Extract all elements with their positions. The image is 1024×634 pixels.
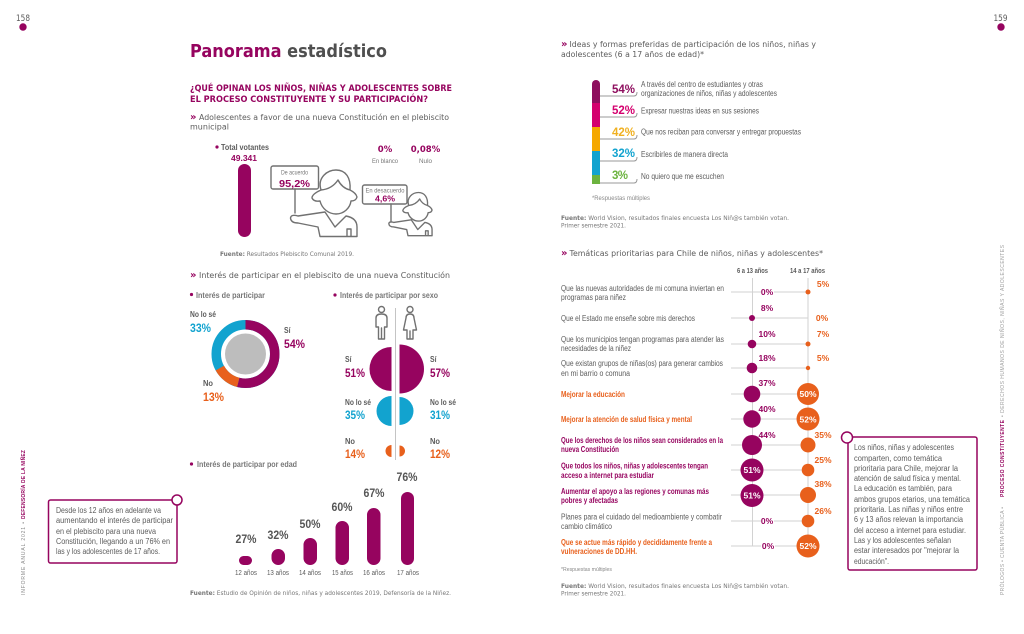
panel: interés por sexo: No lo sé <box>345 398 371 407</box>
row labels: Que todos los niños, niñas y adolescentes tengan <box>561 462 708 470</box>
list: formas de participación: 42% <box>612 127 635 139</box>
percentages 6 a 13 años: 8% <box>761 303 774 313</box>
stat: en blanco y nulo <box>372 145 441 165</box>
list: formas de participación: Escribirles de manera directa <box>641 150 728 159</box>
percentages 6 a 13 años: 0% <box>761 287 774 297</box>
row labels: nueva Constitución <box>561 445 619 454</box>
panel: interés de participar donut: Interés de participar <box>196 291 265 300</box>
subheading: adolescentes a favor: Adolescentes a favor de una nueva Constitución en el plebiscito <box>199 112 449 122</box>
age labels: 15 años <box>332 570 353 577</box>
percentages 6 a 13 años: 51% <box>743 465 761 475</box>
page number 159 <box>994 14 1008 31</box>
list: formas de participación: 32% <box>612 148 635 160</box>
panel: interés de participar donut <box>190 291 305 404</box>
side text left <box>19 450 27 595</box>
callout: desde los 12 años: las y los adolescentes de 17 años. <box>56 547 160 556</box>
callout: los niños, niñas y adolescentes: atención de salud física y mental. <box>854 474 961 483</box>
list: formas de participación: 52% <box>612 105 635 117</box>
panel: interés por sexo: 12% <box>430 449 450 461</box>
chart: temáticas prioritarias <box>561 268 832 558</box>
subheading: interés de participar: » <box>190 270 196 281</box>
panel: interés de participar donut: 33% <box>190 323 211 335</box>
percentages 14 a 17 años: 38% <box>814 479 832 489</box>
source: world vision 2 <box>561 583 789 598</box>
panel: interés por edad bar chart: Interés de participar por edad <box>197 460 297 469</box>
percentages 14 a 17 años: 52% <box>799 541 817 551</box>
panel: total votantes <box>215 143 269 237</box>
icon: woman <box>404 306 416 339</box>
callout: los niños, niñas y adolescentes: La educación es también, para <box>854 484 952 493</box>
side text left: DEFENSORÍA DE LA NIÑEZ <box>19 450 27 519</box>
row labels: vulneraciones de DD.HH. <box>561 547 637 556</box>
panel: interés por sexo: No <box>430 437 440 446</box>
percentages 6 a 13 años: 0% <box>762 541 775 551</box>
subheading: ideas y formas: » <box>561 39 567 50</box>
panel: interés por sexo: 57% <box>430 368 450 380</box>
callout: desde los 12 años: aumentando el interés de participar <box>56 516 173 525</box>
callout: desde los 12 años: en el plebiscito para una nueva <box>56 527 156 536</box>
row labels: acceso a internet para estudiar <box>561 471 654 480</box>
row labels: necesidades de la niñez <box>561 344 631 353</box>
subheading: adolescentes a favor <box>190 112 449 132</box>
callout: desde los 12 años: Constitución, llegando a un 76% en <box>56 537 170 546</box>
callout: los niños, niñas y adolescentes: prioritaria. Las niñas y niños entre <box>854 505 964 514</box>
side text right: PROCESO CONSTITUYENTE <box>1000 419 1006 497</box>
panel: interés por sexo: No lo sé <box>430 398 456 407</box>
callout: los niños, niñas y adolescentes: Las y los adolescentes señalan <box>854 536 951 545</box>
page number 159: 159 <box>994 14 1008 24</box>
age labels: 17 años <box>397 570 419 577</box>
half circles <box>370 344 424 457</box>
page number 158 <box>16 14 30 31</box>
row labels: cambio climático <box>561 522 612 531</box>
source: plebiscito: Fuente: Resultados Plebiscito Comunal 2019. <box>220 252 354 258</box>
source: world vision 1: Fuente: World Vision, resultados finales encuesta Los Niñ@s también votan. <box>561 215 789 222</box>
title: Panorama estadístico <box>190 41 387 62</box>
list: formas de participación: No quiero que me escuchen <box>641 172 724 181</box>
callout: los niños, niñas y adolescentes: prioritaria para Chile, mejorar la <box>854 464 959 473</box>
percentages 14 a 17 años: 25% <box>814 455 832 465</box>
callout: los niños, niñas y adolescentes <box>842 432 977 570</box>
subheading: ideas y formas <box>561 39 816 59</box>
icon: adolescent with sign en desacuerdo <box>362 185 432 236</box>
age labels: 14 años <box>299 570 321 577</box>
subheading: ideas y formas: adolescentes (6 a 17 años de edad)* <box>561 50 704 59</box>
list: formas de participación: organizaciones de niños, niñas y adolescentes <box>641 89 777 98</box>
callout: los niños, niñas y adolescentes: comparten, como temática <box>854 454 943 463</box>
callout: los niños, niñas y adolescentes: Los niños, niñas y adolescentes <box>854 443 954 452</box>
section question heading: ¿QUÉ OPINAN LOS NIÑOS, NIÑAS Y ADOLESCENTES SOBRE <box>190 82 452 94</box>
stat: en blanco y nulo: Nulo <box>419 158 432 165</box>
percentages 14 a 17 años: 52% <box>799 414 817 424</box>
section question heading <box>190 82 452 105</box>
column headers <box>737 268 825 275</box>
callout: los niños, niñas y adolescentes: estar interesados por "mejorar la <box>854 546 959 555</box>
list: formas de participación: 3% <box>612 170 628 182</box>
list: formas de participación: Expresar nuestras ideas en sus sesiones <box>641 106 759 116</box>
panel: total votantes: 49.341 <box>231 153 257 163</box>
callout: desde los 12 años: Desde los 12 años en adelante va <box>56 506 161 515</box>
values: 67% <box>364 488 384 500</box>
row labels: Que existan grupos de niñas(os) para generar cambios <box>561 359 723 368</box>
panel: interés por sexo: 51% <box>345 368 365 380</box>
source: estudio de opinión: Fuente: Estudio de Opinión de niños, niñas y adolescentes 2019, Defensoría de la Niñez. <box>190 590 451 597</box>
subheading: adolescentes a favor: municipal <box>190 122 229 132</box>
percentages 6 a 13 años: 51% <box>743 490 761 500</box>
stat: en blanco y nulo: En blanco <box>372 158 398 165</box>
panel: interés por sexo: Sí <box>345 355 352 364</box>
age labels: 16 años <box>363 570 385 577</box>
panel: interés por sexo: 14% <box>345 449 365 461</box>
age labels: 13 años <box>267 570 289 577</box>
icon: adolescent with sign de acuerdo: De acuerdo <box>281 170 308 176</box>
icon: adolescent with sign de acuerdo: 95,2% <box>279 178 311 190</box>
values <box>236 472 418 546</box>
panel: interés por sexo: Sí <box>430 355 437 364</box>
list: formas de participación: Que nos reciban para conversar y entregar propuestas <box>641 128 801 136</box>
panel: interés de participar donut: No lo sé <box>190 310 216 319</box>
row labels: programas para niñez <box>561 293 626 302</box>
percentages 14 a 17 años: 0% <box>816 313 829 323</box>
panel: interés por sexo: Interés de participar por sexo <box>340 291 438 300</box>
column headers: 14 a 17 años <box>790 268 825 275</box>
percentages 14 a 17 años <box>799 279 832 551</box>
row labels: Mejorar la educación <box>561 390 625 399</box>
percentages 14 a 17 años: 7% <box>817 329 830 339</box>
percentages 14 a 17 años: 50% <box>799 389 817 399</box>
panel: interés de participar donut: Sí <box>284 326 291 335</box>
row labels <box>561 284 724 556</box>
values: 27% <box>236 534 256 546</box>
callout: los niños, niñas y adolescentes: ambos grupos etarios, una temática <box>854 495 970 504</box>
panel: interés por sexo <box>333 291 456 461</box>
grid lines <box>731 278 808 546</box>
values: 32% <box>268 530 288 542</box>
list: formas de participación <box>612 80 801 182</box>
panel: interés de participar donut: No <box>203 379 213 388</box>
values: 76% <box>396 472 418 484</box>
source: world vision 2: Primer semestre 2021. <box>561 592 626 598</box>
percentages 6 a 13 años: 44% <box>758 430 776 440</box>
percentages 14 a 17 años: 5% <box>817 279 830 289</box>
subheading: adolescentes a favor: » <box>190 112 196 123</box>
subheading: temáticas prioritarias: Temáticas prioritarias para Chile de niños, niñas y adolescentes* <box>569 249 823 258</box>
values: 50% <box>300 519 320 531</box>
column headers: 6 a 13 años <box>737 268 768 275</box>
panel: total votantes: Total votantes <box>221 143 269 152</box>
percentages 6 a 13 años: 40% <box>758 404 776 414</box>
section question heading: EL PROCESO CONSTITUYENTE Y SU PARTICIPACIÓN? <box>190 93 428 105</box>
bubbles 6 a 13 años <box>740 315 764 507</box>
percentages 14 a 17 años: 35% <box>814 430 832 440</box>
age labels: 12 años <box>235 570 257 577</box>
side text left: INFORME ANUAL 2021 • <box>21 522 27 595</box>
percentages 6 a 13 años: 37% <box>758 378 776 388</box>
icon: adolescent with sign en desacuerdo: 4,6% <box>375 194 395 204</box>
row labels: Que el Estado me enseñe sobre mis derechos <box>561 314 695 323</box>
percentages 6 a 13 años: 0% <box>761 516 774 526</box>
panel: interés por edad bar chart <box>190 460 419 577</box>
bubbles 14 a 17 años <box>796 290 820 558</box>
subheading: ideas y formas: Ideas y formas preferidas de participación de los niños, niñas y <box>570 39 816 49</box>
source: world vision 2: Fuente: World Vision, resultados finales encuesta Los Niñ@s también votan. <box>561 583 789 590</box>
row labels: Que los derechos de los niños sean considerados en la <box>561 436 723 445</box>
bars <box>239 492 414 565</box>
panel: interés por sexo: 35% <box>345 410 365 422</box>
panel: interés por sexo: 31% <box>430 410 450 422</box>
values: 60% <box>332 502 352 514</box>
percentages 6 a 13 años: 18% <box>758 353 776 363</box>
percentages 14 a 17 años: 26% <box>814 506 832 516</box>
note: respuestas múltiples 2: *Respuestas múltiples <box>561 567 612 573</box>
source: world vision 1: Primer semestre 2021. <box>561 224 626 230</box>
stat: en blanco y nulo: 0% <box>378 145 393 155</box>
row labels: en mi barrio o comuna <box>561 369 630 378</box>
row labels: Que los municipios tengan programas para atender las <box>561 335 724 344</box>
note: respuestas múltiples: *Respuestas múltiples <box>592 196 650 202</box>
callout: los niños, niñas y adolescentes: del acceso a internet para estudiar. <box>854 526 966 535</box>
callout: los niños, niñas y adolescentes: 6 y 13 años relevan la importancia <box>854 515 963 524</box>
row labels: Aumentar el apoyo a las regiones y comunas más <box>561 487 709 496</box>
side text right <box>999 244 1006 595</box>
age labels <box>235 570 419 577</box>
row labels: Que las nuevas autoridades de mi comuna inviertan en <box>561 284 724 293</box>
subheading: temáticas prioritarias: » <box>561 248 567 259</box>
stacked bar: formas de participación <box>592 80 637 184</box>
percentages 6 a 13 años <box>743 287 776 551</box>
row labels: Mejorar la atención de salud física y mental <box>561 415 692 424</box>
list: formas de participación: 54% <box>612 84 635 96</box>
icon: man <box>376 306 387 339</box>
icon: adolescent with sign de acuerdo <box>271 166 357 236</box>
row labels: pobres y afectadas <box>561 496 618 505</box>
panel: interés de participar donut: 13% <box>203 392 224 404</box>
callout: los niños, niñas y adolescentes: educación". <box>854 557 889 566</box>
source: world vision 1 <box>561 215 789 230</box>
side text right: • DERECHOS HUMANOS DE NIÑOS, NIÑAS Y ADOLESCENTES <box>999 244 1006 417</box>
percentages 14 a 17 años: 5% <box>817 353 830 363</box>
donut chart <box>216 325 275 383</box>
stat: en blanco y nulo: 0,08% <box>411 145 441 155</box>
subheading: interés de participar: Interés de participar en el plebiscito de una nueva Constitución <box>199 270 450 280</box>
page number 158: 158 <box>16 14 30 24</box>
row labels: Que se actue más rápido y decididamente frente a <box>561 538 712 547</box>
panel: interés de participar donut: 54% <box>284 339 305 351</box>
callout: desde los 12 años <box>48 495 182 563</box>
icon: adolescent with sign en desacuerdo: En desacuerdo <box>366 188 405 194</box>
row labels: Planes para el cuidado del medioambiente y combatir <box>561 512 722 522</box>
side text right: PRÓLOGOS • CUENTA PÚBLICA • <box>999 507 1006 595</box>
list: formas de participación: A través del centro de estudiantes y otras <box>641 80 763 89</box>
panel: interés por sexo: No <box>345 437 355 446</box>
percentages 6 a 13 años: 10% <box>758 329 776 339</box>
